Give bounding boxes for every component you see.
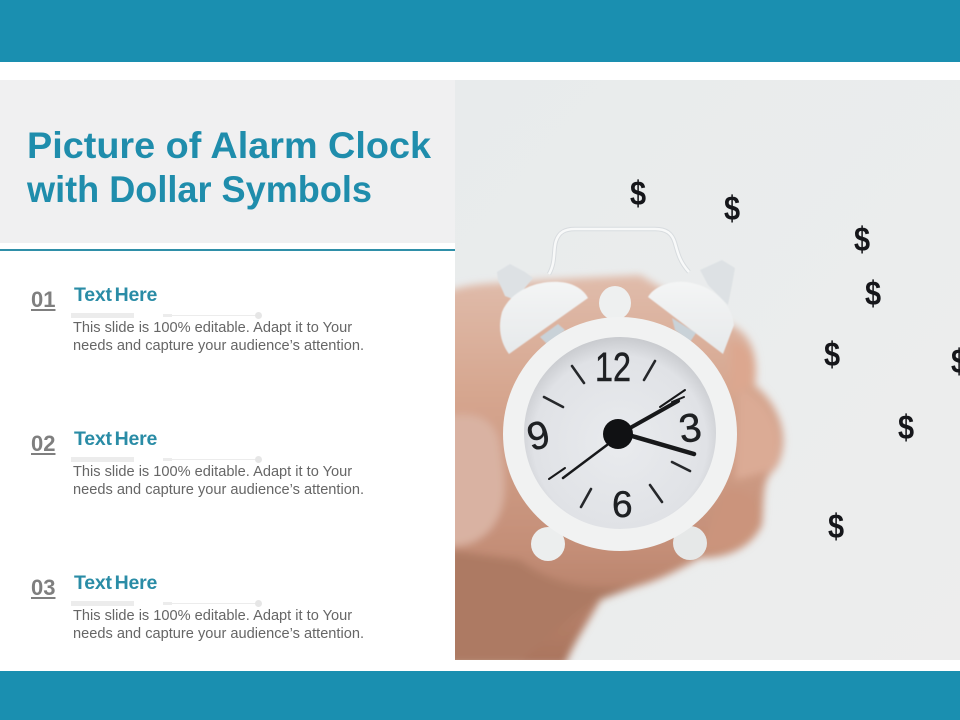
slider start 02 [163,458,172,461]
dollar symbols: $ [630,174,646,213]
slider line 01 [172,315,256,316]
slider start 01 [163,314,172,317]
title panel [0,80,455,243]
slider knob 03 [255,600,262,607]
description 02 [73,464,364,498]
number 01: 01 [31,287,55,312]
clock numerals: 6 [612,484,633,525]
dollar symbols: $ [865,274,881,313]
dollar symbols: $ [828,507,844,546]
description 02: needs and capture your audience’s attention. [73,482,364,498]
number 02: 02 [31,431,55,456]
slider bar 03 [71,601,134,606]
clock hub [603,419,633,449]
clock feet [531,526,707,561]
slider start 03 [163,602,172,605]
heading 03: Text Here [74,572,157,594]
description 01: This slide is 100% editable. Adapt it to Your [73,320,352,336]
clock center knob [599,286,631,320]
clock numerals [528,352,701,518]
title divider [0,249,455,251]
clock numerals: 9 [523,413,554,460]
item 01 [31,284,364,354]
dollar symbols: $ [724,189,740,228]
description 02: This slide is 100% editable. Adapt it to Your [73,464,352,480]
slider knob 02 [255,456,262,463]
clock face [524,337,716,529]
heading 02: Text Here [74,428,157,450]
clock handle [549,229,689,274]
title [26,125,431,210]
title: Picture of Alarm Clock [27,125,431,166]
clock ticks [544,361,690,507]
description 01: needs and capture your audience’s attention. [73,338,364,354]
bottom band [0,671,960,720]
photo: hand holding alarm clock [455,80,960,660]
dollar symbols: $ [898,408,914,447]
title: with Dollar Symbols [26,169,372,210]
slider line 02 [172,459,256,460]
photo background [455,80,960,660]
slider line 03 [172,603,256,604]
dollar symbols: $ [824,335,840,374]
item 03 [31,572,364,642]
slider knob 01 [255,312,262,319]
clock numerals: 3 [676,405,704,452]
description 03: This slide is 100% editable. Adapt it to Your [73,608,352,624]
dollar symbols [630,174,960,546]
clock hands [549,390,694,479]
description 03 [73,608,364,642]
heading 01: Text Here [74,284,157,306]
item 02 [31,428,364,498]
description 03: needs and capture your audience’s attention. [73,626,364,642]
number 03: 03 [31,575,55,600]
description 01 [73,320,364,354]
slider bar 02 [71,457,134,462]
left bell [497,264,588,354]
hand [440,275,783,665]
clock ring [503,317,737,551]
top band [0,0,960,62]
clock numerals: 12 [595,344,631,390]
right bell [648,260,735,354]
slider bar 01 [71,313,134,318]
dollar symbols: $ [854,220,870,259]
